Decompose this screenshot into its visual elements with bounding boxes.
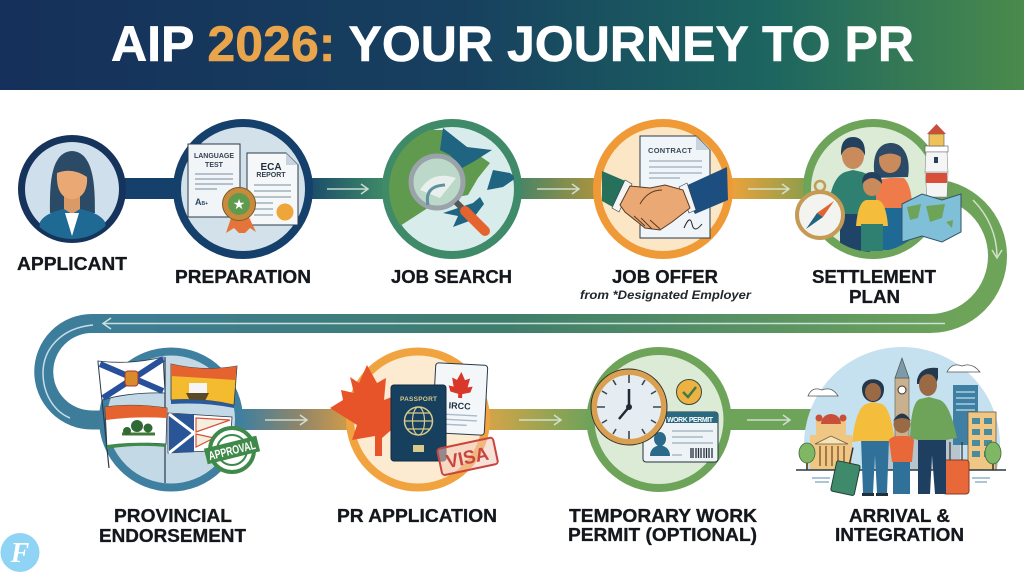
logo badge: F xyxy=(10,538,30,569)
icon: map and magnifying glass xyxy=(385,123,518,255)
label: temporary work permit: TEMPORARY WORK xyxy=(569,506,757,526)
label: preparation: PREPARATION xyxy=(175,267,311,287)
title banner: AIP 2026: YOUR JOURNEY TO PR xyxy=(111,16,914,72)
panel: job search xyxy=(385,123,518,287)
icon: language test and ECA report xyxy=(177,123,309,255)
label: job offer: JOB OFFER xyxy=(612,267,718,287)
logo badge xyxy=(0,533,40,572)
icon: clock and work permit card: WORK PERMIT xyxy=(667,417,714,424)
label: arrival and integration xyxy=(835,506,964,545)
connector: row one path xyxy=(120,178,806,199)
panel: settlement plan xyxy=(797,123,961,307)
panel: job offer xyxy=(580,123,752,302)
icon: language test and ECA report: AB+ xyxy=(195,197,208,207)
icon: family with compass, lighthouse and map xyxy=(797,123,961,258)
label: settlement plan xyxy=(812,267,936,307)
label: arrival and integration: ARRIVAL & xyxy=(849,506,950,526)
icon: language test and ECA report: ECA xyxy=(260,162,282,173)
icon: language test and ECA report: LANGUAGE xyxy=(194,153,234,160)
label: settlement plan: PLAN xyxy=(849,287,900,307)
icon: family arriving in a city xyxy=(796,340,1006,496)
label: provincial endorsement: ENDORSEMENT xyxy=(99,526,246,546)
label: job search: JOB SEARCH xyxy=(391,267,512,287)
icon: language test and ECA report: REPORT xyxy=(256,172,286,179)
arrows on connectors xyxy=(265,184,790,425)
icon: maple leaf, passport, IRCC letter and visa stamp: PASSPORT xyxy=(400,396,437,403)
icon: provincial flags with approval stamp xyxy=(98,352,260,488)
icon: maple leaf, passport, IRCC letter and visa stamp: IRCC xyxy=(448,400,471,412)
label: applicant: APPLICANT xyxy=(17,254,127,274)
panel: temporary work permit xyxy=(568,351,757,545)
panel: preparation xyxy=(175,123,311,287)
icon: applicant portrait xyxy=(22,138,122,240)
connector: winding path between rows xyxy=(43,188,1002,420)
label: settlement plan: SETTLEMENT xyxy=(812,267,936,287)
connector: row two path xyxy=(236,409,815,430)
icon: language test and ECA report: TEST xyxy=(205,162,224,169)
icon: handshake over contract xyxy=(597,123,729,255)
panel: PR application xyxy=(330,352,498,526)
icon: language test and ECA report: ★ xyxy=(233,196,245,212)
label: arrival and integration: INTEGRATION xyxy=(835,525,964,545)
panel: applicant xyxy=(17,138,127,274)
icon: provincial flags with approval stamp: APPROVAL xyxy=(207,438,257,463)
icon: handshake over contract: CONTRACT xyxy=(648,146,692,155)
panel: provincial endorsement xyxy=(98,352,260,546)
label: provincial endorsement: PROVINCIAL xyxy=(114,506,232,526)
label: temporary work permit xyxy=(568,506,757,545)
icon: clock and work permit card xyxy=(590,351,728,488)
sublabel: designated employer: from *Designated Employer xyxy=(580,288,752,302)
label: PR application: PR APPLICATION xyxy=(337,506,497,526)
label: provincial endorsement xyxy=(99,506,246,546)
title banner xyxy=(0,0,1024,90)
icon: maple leaf, passport, IRCC letter and visa stamp: VISA xyxy=(444,444,491,473)
icon: maple leaf, passport, IRCC letter and visa stamp xyxy=(330,352,498,488)
panel: arrival and integration xyxy=(796,340,1006,545)
label: temporary work permit: PERMIT (OPTIONAL) xyxy=(568,525,757,545)
